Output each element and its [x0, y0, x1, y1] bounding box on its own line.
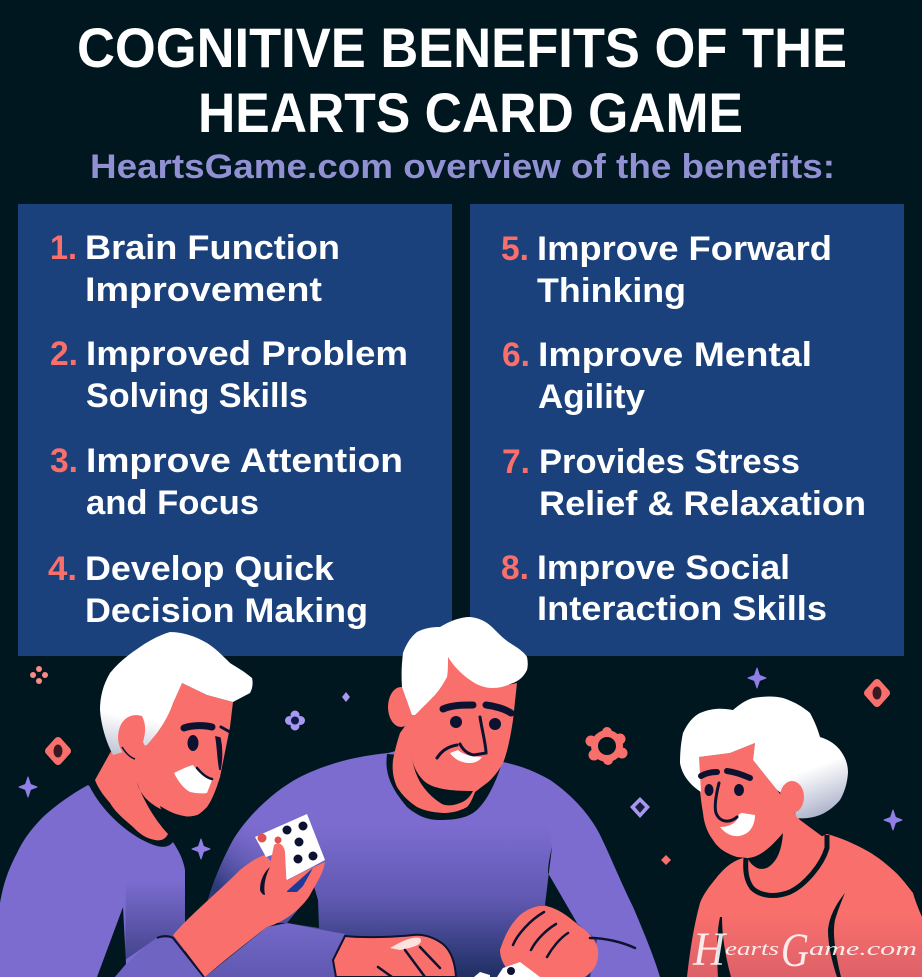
title: COGNITIVE BENEFITS OF THE: [77, 16, 847, 79]
illustration: left man: [0, 632, 325, 977]
left man chin shadow: [137, 782, 200, 840]
finger on card: [271, 843, 287, 895]
benefit 8: 8.: [501, 549, 529, 587]
benefit 1: 1.: [50, 229, 77, 267]
center man near arm: [205, 923, 345, 977]
benefit 4: 4.: [48, 550, 77, 588]
hand gap: [260, 867, 270, 895]
icon: pink flower: [49, 741, 67, 761]
center man collar: [386, 754, 502, 820]
woman neck and face: [699, 743, 827, 897]
woman hair: [680, 696, 848, 818]
benefit 1: Improvement: [85, 271, 322, 309]
left man collar: [88, 775, 173, 847]
center man chin shadow: [411, 752, 473, 805]
illustration: center man: [205, 617, 660, 977]
benefit 5: [501, 230, 832, 310]
benefit 4: Develop Quick: [85, 550, 334, 588]
center man ear: [388, 687, 414, 727]
center man body gap: [287, 883, 319, 928]
woman chin shadow: [748, 833, 783, 869]
benefit 5: Thinking: [537, 272, 686, 310]
title: [77, 16, 847, 144]
center man brows and eyes: [443, 705, 511, 730]
left man sleeve: [115, 936, 205, 977]
icon: pink diamond: [868, 683, 886, 703]
title: HEARTS CARD GAME: [198, 81, 743, 144]
benefit 6: [502, 336, 812, 416]
center man left hand: [333, 935, 456, 977]
left man hair: [100, 632, 253, 755]
woman face details: [701, 771, 755, 836]
benefit 2: Solving Skills: [86, 377, 308, 415]
benefit 7: Provides Stress: [539, 443, 800, 481]
center man hair: [402, 617, 528, 715]
playing card on table: [474, 962, 540, 977]
icon: purple star: [192, 839, 210, 859]
benefit 2: Improved Problem: [86, 335, 408, 373]
benefit 1: Brain Function: [85, 229, 340, 267]
icon: purple star: [19, 777, 37, 797]
icon: pink dots: [30, 666, 48, 684]
benefit 2: 2.: [50, 335, 78, 373]
center man right hand: [500, 906, 635, 977]
benefit 7: Relief & Relaxation: [539, 485, 866, 523]
left man body: [0, 785, 185, 977]
benefit 7: [502, 443, 866, 523]
watermark: earts: [725, 939, 779, 960]
left man arm and hand: [173, 855, 325, 977]
playing cards: [255, 814, 325, 895]
benefit 8: [501, 549, 827, 628]
center man shoulder shading: [207, 805, 300, 923]
benefit 3: [50, 442, 403, 522]
benefit 5: 5.: [501, 230, 529, 268]
panel: benefits 5 to 8: [470, 204, 904, 656]
woman body: [687, 834, 922, 977]
illustration: woman: [680, 696, 922, 977]
left man ear: [118, 715, 148, 760]
benefit 6: 6.: [502, 336, 530, 374]
left man fold: [97, 907, 126, 977]
benefit 4: [48, 550, 368, 630]
benefit 3: and Focus: [86, 484, 259, 522]
left man body shading: [125, 880, 185, 960]
icon: small pink diamond: [661, 855, 671, 865]
left man neck and face: [95, 683, 233, 840]
benefit 2: [50, 335, 408, 415]
woman collar: [746, 835, 827, 895]
center man fold: [545, 847, 577, 923]
watermark: [692, 923, 917, 977]
center man neck and face: [393, 657, 517, 813]
icon: small purple diamond: [342, 692, 350, 702]
center man right arm: [540, 775, 660, 977]
benefit 8: Interaction Skills: [537, 590, 827, 628]
benefit 6: Agility: [538, 378, 645, 416]
center man nose and smile: [437, 717, 486, 763]
subtitle: HeartsGame.com overview of the benefits:: [90, 148, 835, 186]
benefit 7: 7.: [502, 443, 530, 481]
woman ear: [780, 781, 804, 813]
watermark: H: [692, 923, 727, 976]
icon: pink gear: [586, 727, 628, 765]
benefit 5: Improve Forward: [537, 230, 832, 268]
sparkles: [19, 666, 902, 865]
watermark: G: [781, 924, 809, 977]
benefit 3: Improve Attention: [86, 442, 403, 480]
icon: purple diamond: [630, 797, 650, 818]
icon: purple star: [884, 810, 902, 830]
benefit 4: Decision Making: [85, 592, 368, 630]
watermark: ame.com: [809, 939, 917, 960]
panel: benefits 1 to 4: [18, 204, 452, 656]
icon: purple flower: [285, 710, 305, 730]
left man face details: [122, 726, 230, 793]
benefit 6: Improve Mental: [538, 336, 812, 374]
center man body: [207, 750, 660, 977]
benefit 1: [50, 229, 340, 309]
icon: purple star: [748, 668, 766, 688]
benefit 8: Improve Social: [537, 549, 790, 587]
woman arm folds: [717, 917, 731, 977]
benefit 3: 3.: [50, 442, 78, 480]
